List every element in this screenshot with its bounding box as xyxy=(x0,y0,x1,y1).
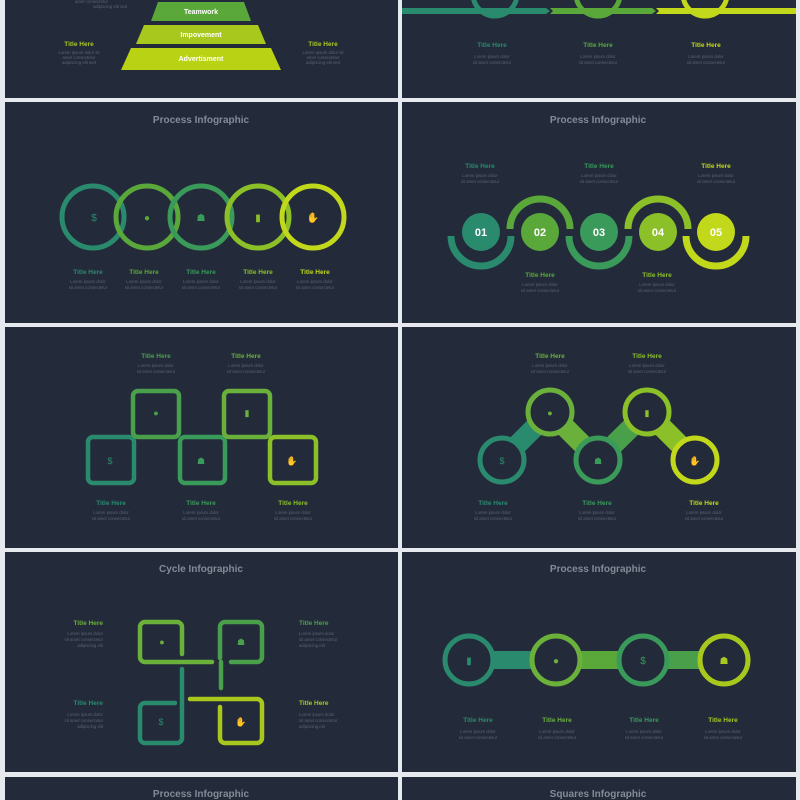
numbered circles: 05 xyxy=(710,227,722,239)
panel: bottom left xyxy=(5,777,398,800)
icons: ✋ xyxy=(689,455,701,466)
titles: Lorem ipsum dolor xyxy=(126,279,162,284)
text: right title: Lorem ipsum dolor sit xyxy=(302,50,344,55)
titles: Title Here xyxy=(141,353,171,360)
titles: Title Here xyxy=(691,42,721,49)
titles: Title Here xyxy=(525,272,555,279)
titles: Lorem ipsum dolor xyxy=(462,173,498,178)
icons: ✋ xyxy=(286,455,298,466)
titles: Lorem ipsum dolor xyxy=(705,729,741,734)
heading: Cycle Infographic xyxy=(159,564,243,575)
titles: Title Here xyxy=(542,717,572,724)
pyramid band: advertisment: Advertisment xyxy=(179,56,224,63)
titles: Title Here xyxy=(478,500,508,507)
titles: sit amet consectetur xyxy=(137,369,176,374)
titles: Lorem ipsum dolor xyxy=(297,279,333,284)
titles: Lorem ipsum dolor xyxy=(629,363,665,368)
titles: Lorem ipsum dolor xyxy=(475,510,511,515)
circles xyxy=(445,636,748,684)
titles: Title Here xyxy=(629,717,659,724)
pyramid band: advertisment xyxy=(121,48,281,70)
titles: Title Here xyxy=(278,500,308,507)
titles: sit amet consectetur xyxy=(69,285,108,290)
titles: sit amet consectetur xyxy=(227,369,266,374)
titles: Lorem ipsum dolor xyxy=(688,54,724,59)
titles: Lorem ipsum dolor xyxy=(580,54,616,59)
panel: process circles xyxy=(5,102,398,323)
titles: sit amet consectetur xyxy=(687,60,726,65)
titles: Title Here xyxy=(708,717,738,724)
icons: $ xyxy=(91,213,97,224)
numbered circles: 01 xyxy=(475,227,487,239)
titles: Lorem ipsum dolor xyxy=(67,712,104,717)
titles: Title Here xyxy=(231,353,261,360)
titles: sit amet consectetur xyxy=(685,516,724,521)
titles: Lorem ipsum dolor xyxy=(532,363,568,368)
titles: sit amet consectetur xyxy=(239,285,278,290)
icons: ▮ xyxy=(245,408,250,418)
ring chain xyxy=(62,186,344,248)
titles: sit amet consectetur xyxy=(65,637,104,642)
icons: ● xyxy=(153,408,159,418)
titles: Lorem ipsum dolor xyxy=(93,510,129,515)
pyramid band: impovement xyxy=(136,25,266,44)
titles xyxy=(69,269,335,290)
icons: ▮ xyxy=(255,213,261,224)
titles: sit amet consectetur xyxy=(474,516,513,521)
text: right title xyxy=(302,41,344,65)
titles: sit amet consectetur xyxy=(299,637,338,642)
titles: Title Here xyxy=(73,700,103,707)
panel: cycle xyxy=(5,552,398,772)
icons: ☗ xyxy=(594,456,602,466)
titles: adipiscing elit xyxy=(77,724,104,729)
panel: squares path xyxy=(5,327,398,548)
titles: Lorem ipsum dolor xyxy=(581,173,617,178)
titles: adipiscing elit xyxy=(299,643,326,648)
text: left title: adipiscing elit sed xyxy=(62,60,97,65)
connectors xyxy=(469,651,724,669)
titles xyxy=(473,42,726,65)
titles: sit amet consectetur xyxy=(459,735,498,740)
titles: Lorem ipsum dolor xyxy=(474,54,510,59)
titles: Lorem ipsum dolor xyxy=(299,712,335,717)
square loops xyxy=(88,391,316,483)
icons: $ xyxy=(107,456,113,466)
pyramid band: impovement: Impovement xyxy=(180,32,222,39)
circles above bar xyxy=(473,0,727,16)
icons: ☗ xyxy=(197,213,206,224)
icons: ● xyxy=(159,637,165,647)
titles: sit amet consectetur xyxy=(521,288,560,293)
titles: Lorem ipsum dolor xyxy=(183,279,219,284)
heading: Process Infographic xyxy=(550,115,647,126)
titles: sit amet consectetur xyxy=(299,718,338,723)
titles: Lorem ipsum dolor xyxy=(138,363,174,368)
text: left title: Lorem ipsum dolor sit xyxy=(58,50,100,55)
titles: Lorem ipsum dolor xyxy=(183,510,219,515)
titles: Title Here xyxy=(477,42,507,49)
text: left title: amet consectetur xyxy=(63,55,96,60)
circles xyxy=(480,390,717,482)
titles: Lorem ipsum dolor xyxy=(698,173,734,178)
titles: sit amet consectetur xyxy=(579,60,618,65)
panel: bottom left: Process Infographic xyxy=(153,789,250,800)
titles: sit amet consectetur xyxy=(296,285,335,290)
titles: Title Here xyxy=(96,500,126,507)
arcs xyxy=(451,199,746,266)
titles: sit amet consectetur xyxy=(704,735,743,740)
icons: ✋ xyxy=(307,211,319,224)
icons: ▮ xyxy=(645,408,650,418)
titles: sit amet consectetur xyxy=(182,285,221,290)
titles: Title Here xyxy=(299,620,329,627)
titles: Title Here xyxy=(465,163,495,170)
titles: sit amet consectetur xyxy=(697,179,736,184)
connectors xyxy=(502,412,695,460)
icons xyxy=(158,637,247,727)
panel: process chain xyxy=(402,552,796,772)
text: left top: adipiscing elit sed xyxy=(93,4,128,9)
icons xyxy=(107,408,298,466)
titles: sit amet consectetur xyxy=(182,516,221,521)
titles: Title Here xyxy=(535,353,565,360)
text: left top xyxy=(75,0,128,9)
titles: Lorem ipsum dolor xyxy=(299,631,335,636)
titles: Lorem ipsum dolor xyxy=(275,510,311,515)
icons: ☗ xyxy=(197,456,205,466)
titles: Lorem ipsum dolor xyxy=(70,279,106,284)
titles: Title Here xyxy=(642,272,672,279)
cycle squares xyxy=(140,622,262,743)
heading: Process Infographic xyxy=(550,564,647,575)
icons: $ xyxy=(158,717,164,727)
numbered circles: 02 xyxy=(534,227,546,239)
titles: Title Here xyxy=(701,163,731,170)
titles: Lorem ipsum dolor xyxy=(460,729,496,734)
titles: Title Here xyxy=(584,163,614,170)
icons: ▮ xyxy=(466,656,472,667)
panel: numbered process xyxy=(402,102,796,323)
panel: bottom right: Squares Infographic xyxy=(550,789,647,800)
titles: Lorem ipsum dolor xyxy=(240,279,276,284)
titles xyxy=(65,620,338,729)
heading: Process Infographic xyxy=(153,115,250,126)
pyramid band: teamwork: Teamwork xyxy=(184,9,218,16)
titles xyxy=(474,353,724,521)
titles xyxy=(461,163,736,293)
titles: sit amet consectetur xyxy=(125,285,164,290)
titles: adipiscing elit xyxy=(77,643,104,648)
titles: Title Here xyxy=(73,620,103,627)
titles: Lorem ipsum dolor xyxy=(67,631,104,636)
titles: Lorem ipsum dolor xyxy=(626,729,662,734)
titles: Title Here xyxy=(463,717,493,724)
pyramid band: teamwork xyxy=(151,2,251,21)
panel: pyramid xyxy=(5,0,398,98)
panel: arrow bar xyxy=(402,0,796,98)
text: right title: adipiscing elit sed xyxy=(306,60,341,65)
titles: sit amet consectetur xyxy=(461,179,500,184)
titles: Title Here xyxy=(73,269,103,276)
icons xyxy=(466,656,729,667)
titles: Title Here xyxy=(632,353,662,360)
icons: $ xyxy=(640,656,646,667)
titles: Title Here xyxy=(129,269,159,276)
titles: Lorem ipsum dolor xyxy=(579,510,615,515)
titles: Lorem ipsum dolor xyxy=(539,729,575,734)
icons: ☗ xyxy=(237,637,245,647)
icons: ● xyxy=(553,656,559,667)
titles: Title Here xyxy=(299,700,329,707)
numbered circles: 04 xyxy=(652,227,665,239)
text: right title: amet consectetur xyxy=(307,55,340,60)
titles: sit amet consectetur xyxy=(628,369,667,374)
panel: circle wave xyxy=(402,327,796,548)
titles: sit amet consectetur xyxy=(638,288,677,293)
icons xyxy=(91,211,319,224)
titles: Title Here xyxy=(300,269,330,276)
icons: ● xyxy=(547,408,553,418)
titles: Title Here xyxy=(582,500,612,507)
titles: Lorem ipsum dolor xyxy=(639,282,675,287)
titles: Title Here xyxy=(689,500,719,507)
titles: Title Here xyxy=(186,269,216,276)
titles: sit amet consectetur xyxy=(625,735,664,740)
titles xyxy=(459,717,743,740)
titles: sit amet consectetur xyxy=(580,179,619,184)
icons: ● xyxy=(144,213,150,224)
titles: sit amet consectetur xyxy=(65,718,104,723)
arrow bar segments xyxy=(402,8,796,14)
icons: ☗ xyxy=(720,656,729,667)
text: left title: Title Here xyxy=(64,41,94,48)
titles: sit amet consectetur xyxy=(274,516,313,521)
titles: Title Here xyxy=(583,42,613,49)
titles: sit amet consectetur xyxy=(578,516,617,521)
titles: Lorem ipsum dolor xyxy=(522,282,558,287)
titles: Title Here xyxy=(186,500,216,507)
titles: adipiscing elit xyxy=(299,724,326,729)
icons xyxy=(499,408,701,466)
numbered circles xyxy=(462,213,735,251)
icons: ✋ xyxy=(235,716,247,727)
text: left title xyxy=(58,41,100,65)
titles: sit amet consectetur xyxy=(531,369,570,374)
titles: Lorem ipsum dolor xyxy=(686,510,722,515)
titles: sit amet consectetur xyxy=(92,516,131,521)
titles: sit amet consectetur xyxy=(538,735,577,740)
titles: Lorem ipsum dolor xyxy=(228,363,264,368)
titles: sit amet consectetur xyxy=(473,60,512,65)
panel: bottom right xyxy=(402,777,796,800)
text: right title: Title Here xyxy=(308,41,338,48)
numbered circles: 03 xyxy=(593,227,605,239)
titles: Title Here xyxy=(243,269,273,276)
titles xyxy=(92,353,313,521)
icons: $ xyxy=(499,456,505,466)
